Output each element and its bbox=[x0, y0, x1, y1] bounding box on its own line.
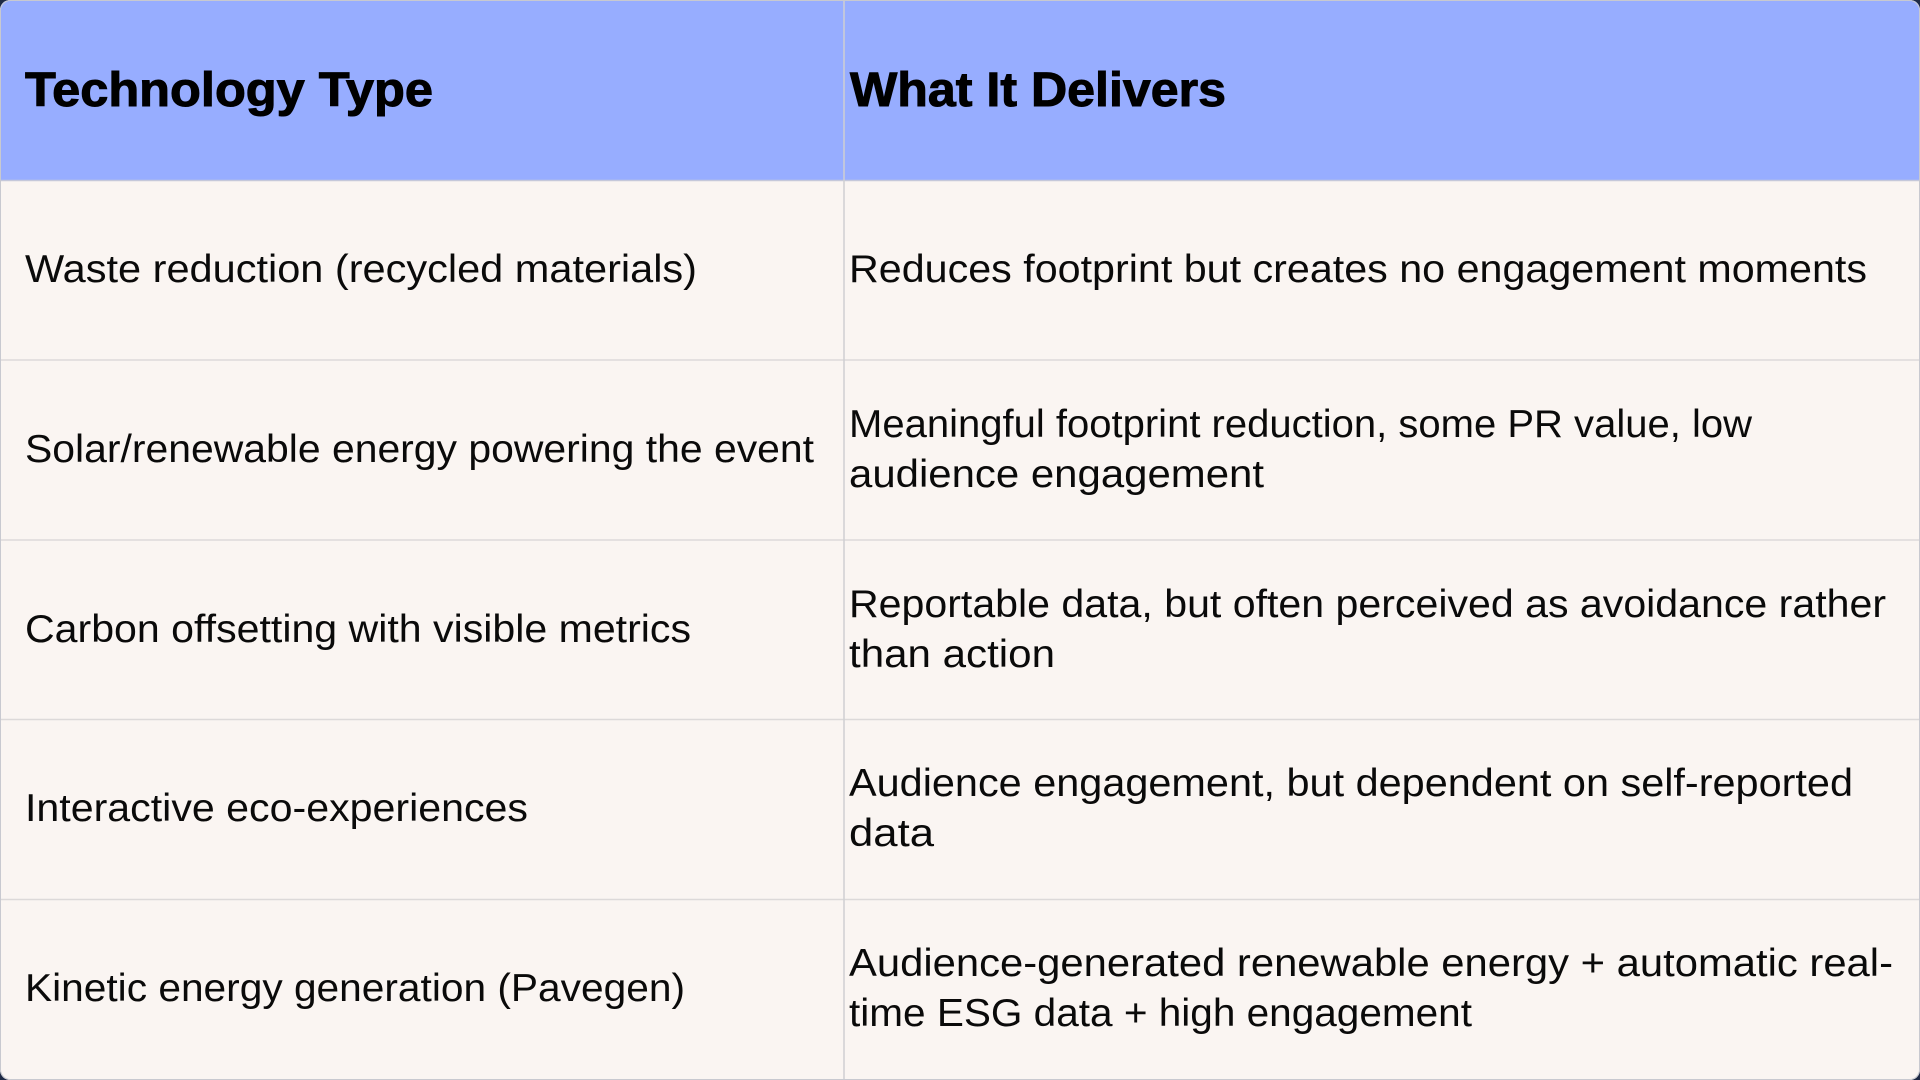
row 5: kinetic energy generation: time ESG data + high engagement bbox=[849, 992, 1472, 1035]
row 4: interactive eco-experiences: Audience engagement, but dependent on self-reported bbox=[849, 762, 1853, 805]
row 1: waste reduction bbox=[25, 254, 1866, 290]
row 3: carbon offsetting bbox=[27, 588, 1886, 668]
row 3: carbon offsetting: than action bbox=[849, 633, 1055, 676]
row 1: waste reduction: Waste reduction (recycled materials) bbox=[25, 248, 697, 291]
row 1: waste reduction: Reduces footprint but creates no engagement moments bbox=[849, 248, 1867, 291]
row 2: solar and renewable energy: audience engagement bbox=[849, 453, 1264, 496]
row 3: carbon offsetting: Carbon offsetting with visible metrics bbox=[25, 608, 691, 651]
heading: Technology Type: Technology Type bbox=[25, 64, 433, 117]
row 4: interactive eco-experiences bbox=[28, 768, 1850, 846]
row 2: solar and renewable energy bbox=[25, 403, 1753, 496]
row 2: solar and renewable energy: Solar/renewable energy powering the event bbox=[25, 428, 814, 471]
row 5: kinetic energy generation: Audience-generated renewable energy + automatic real- bbox=[849, 942, 1893, 985]
row 4: interactive eco-experiences: Interactive eco-experiences bbox=[25, 787, 528, 830]
row 2: solar and renewable energy: Meaningful footprint reduction, some PR value, low bbox=[849, 403, 1753, 446]
heading: What It Delivers: What It Delivers bbox=[850, 64, 1226, 117]
row 5: kinetic energy generation: Kinetic energy generation (Pavegen) bbox=[25, 967, 685, 1010]
row 4: interactive eco-experiences: data bbox=[849, 812, 934, 855]
row 5: kinetic energy generation bbox=[25, 942, 1893, 1035]
header row bbox=[0, 0, 1920, 180]
row 3: carbon offsetting: Reportable data, but often perceived as avoidance rather bbox=[849, 583, 1886, 626]
